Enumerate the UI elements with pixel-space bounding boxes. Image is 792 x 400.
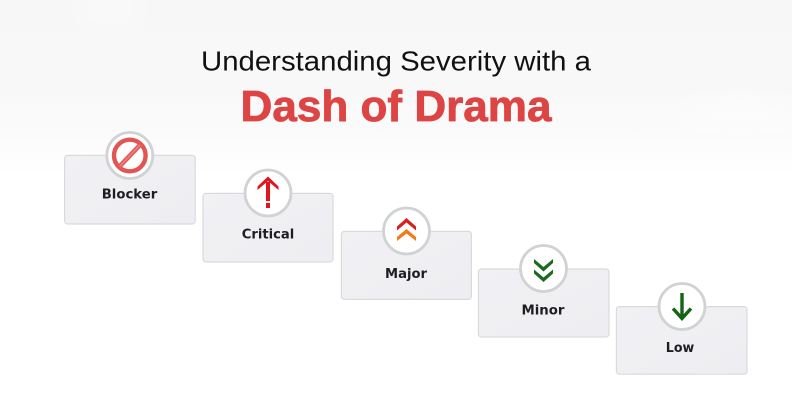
label: Major: Major — [385, 266, 427, 282]
label: Low: Low — [666, 340, 694, 356]
title line 1: Understanding Severity with a — [201, 46, 591, 76]
card: Critical — [203, 170, 333, 262]
card: Low — [616, 284, 747, 374]
icon: low down arrow — [673, 293, 691, 318]
label: Minor: Minor — [522, 302, 565, 318]
card: Blocker — [65, 132, 195, 224]
label: Blocker: Blocker — [102, 186, 158, 202]
icon: major double chevron up — [397, 218, 416, 241]
label: Critical: Critical — [242, 226, 294, 242]
card: Minor — [478, 246, 609, 337]
title line 2: Dash of Drama — [240, 82, 552, 131]
icon: blocker prohibition sign — [114, 140, 146, 171]
title — [201, 46, 591, 131]
icon: critical up arrow — [258, 176, 278, 208]
card: Major — [341, 208, 471, 299]
icon: minor double chevron down — [534, 259, 553, 282]
